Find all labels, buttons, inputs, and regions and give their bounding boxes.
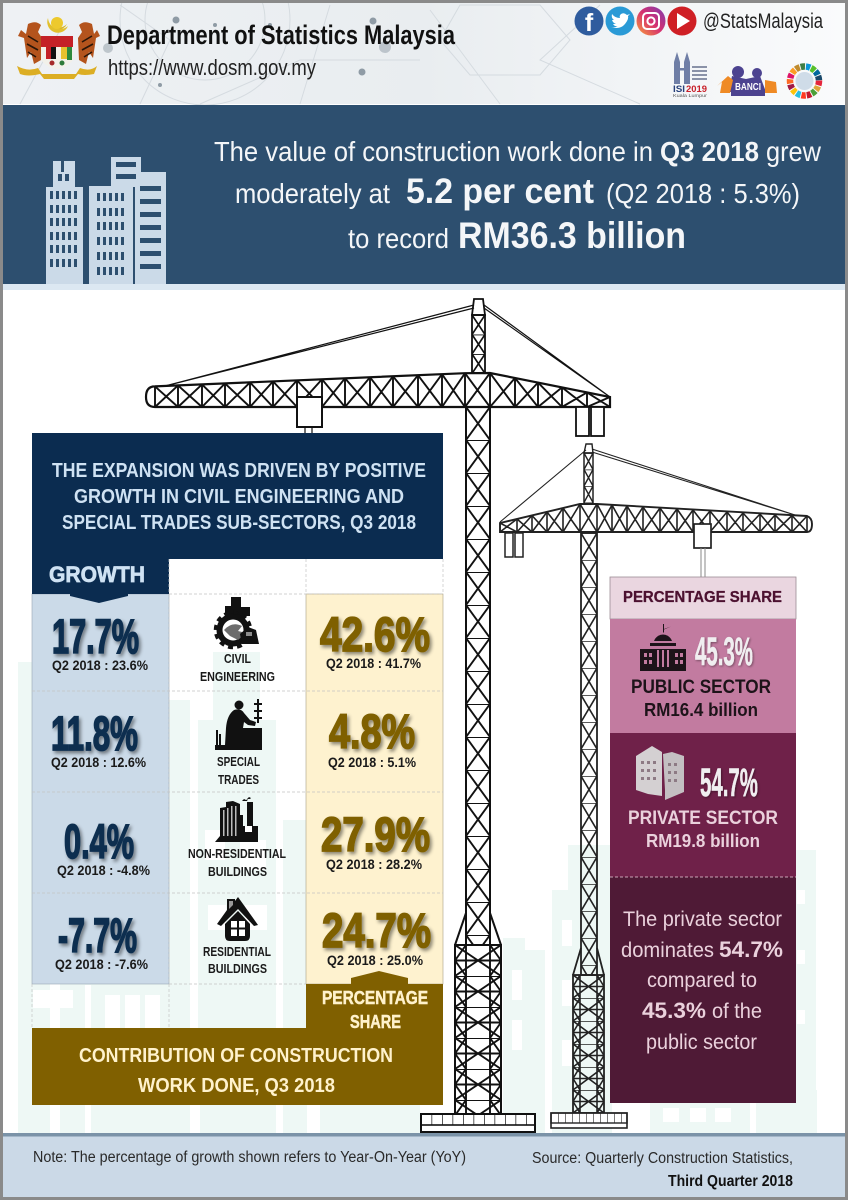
comparison callout: dominates [621, 939, 714, 962]
small tower crane [500, 444, 812, 1128]
small crane counterweights [505, 533, 523, 557]
headline text [214, 136, 821, 256]
logo: SDG wheel [790, 66, 819, 96]
row: civil engineering: Q2 2018 : 23.6% [52, 658, 148, 673]
comparison callout: 54.7% [719, 937, 783, 962]
row: residential buildings: -7.7% [58, 910, 137, 963]
panel footer: CONTRIBUTION OF CONSTRUCTION [79, 1045, 393, 1067]
row: civil engineering: CIVIL [224, 651, 251, 666]
row: special trades: 11.8% [51, 708, 138, 761]
comparison callout: compared to [647, 969, 757, 992]
icon: factory and tower [215, 797, 258, 842]
column: percentage share: SHARE [350, 1012, 401, 1032]
public sector block [610, 619, 796, 733]
public sector block: PUBLIC SECTOR [631, 677, 771, 698]
row: residential buildings: BUILDINGS [208, 961, 267, 976]
row: civil engineering [52, 597, 430, 684]
row: non-residential buildings: 0.4% [64, 816, 134, 869]
public sector block: RM16.4 billion [644, 700, 758, 720]
row: residential buildings: RESIDENTIAL [203, 944, 271, 959]
column: growth: GROWTH [49, 562, 145, 587]
private sector block [610, 733, 796, 877]
headline text: (Q2 2018 : 5.3%) [606, 178, 800, 209]
tigers [18, 22, 42, 64]
row: non-residential buildings: Q2 2018 : -4.8% [57, 863, 150, 878]
panel footer: WORK DONE, Q3 2018 [138, 1075, 335, 1097]
icon: worker silhouette [215, 699, 262, 750]
row: civil engineering: 17.7% [52, 611, 139, 664]
share heading: PERCENTAGE SHARE [623, 589, 782, 606]
icon: house [217, 897, 258, 941]
row: residential buildings: Q2 2018 : -7.6% [55, 957, 148, 972]
small crane jib [500, 504, 812, 532]
logo: ISI 2019: Kuala Lumpur [673, 93, 708, 98]
logo: coat of arms [17, 17, 100, 79]
row: special trades [51, 699, 416, 787]
row: residential buildings: Q2 2018 : 25.0% [327, 953, 423, 968]
source credit: Third Quarter 2018 [668, 1173, 793, 1190]
logo: census: BANCI [735, 82, 761, 93]
footer band [3, 1133, 845, 1197]
small crane mast [573, 533, 604, 1113]
source credit: Source: Quarterly Construction Statistics, [532, 1150, 793, 1167]
comparison callout: of the [712, 1000, 762, 1023]
row: special trades: TRADES [218, 772, 259, 787]
large tower crane [146, 299, 610, 1132]
shield [41, 36, 73, 47]
comparison callout: public sector [646, 1031, 757, 1054]
panel heading: GROWTH IN CIVIL ENGINEERING AND [74, 486, 404, 508]
headline text: The value of construction work done in [214, 136, 653, 167]
logo: ISI 2019: ISI [673, 84, 685, 94]
row: non-residential buildings: NON-RESIDENTIAL [188, 846, 286, 861]
row: civil engineering: Q2 2018 : 41.7% [326, 656, 421, 671]
small crane base [551, 1113, 627, 1128]
crane cab [297, 397, 322, 433]
logo: ISI 2019: 2019 [686, 84, 707, 94]
public sector block: 45.3% [695, 630, 753, 674]
panel: public vs private share [610, 577, 796, 1103]
column: percentage share: PERCENTAGE [322, 988, 428, 1008]
headline text: to record [348, 223, 449, 254]
crane head and cables [165, 299, 610, 397]
private sector block: RM19.8 billion [646, 831, 760, 851]
logo: census [717, 66, 777, 96]
row: non-residential buildings: Q2 2018 : 28.2% [326, 857, 422, 872]
icon: office block [636, 746, 684, 800]
panel heading: SPECIAL TRADES SUB-SECTORS, Q3 2018 [62, 512, 416, 534]
row: special trades: Q2 2018 : 12.6% [51, 755, 146, 770]
row: special trades: SPECIAL [217, 754, 260, 769]
panel footer [79, 1045, 393, 1097]
social media icons: f [585, 9, 594, 37]
small crane cab and hanger [694, 524, 711, 577]
footnote: Note: The percentage of growth shown refers to Year-On-Year (YoY) [33, 1149, 466, 1166]
headline band [3, 105, 845, 290]
comparison callout: The private sector [623, 908, 782, 931]
headline text: Q3 2018 [660, 136, 759, 167]
row: civil engineering: 42.6% [320, 609, 430, 662]
ribbon [17, 66, 97, 79]
row: special trades: Q2 2018 : 5.1% [328, 755, 416, 770]
row: non-residential buildings: BUILDINGS [208, 864, 267, 879]
row: non-residential buildings: 27.9% [321, 809, 430, 862]
table grid lines [32, 559, 443, 1028]
headline text: 5.2 per cent [406, 172, 594, 211]
column: growth [32, 559, 169, 984]
organisation title: Department of Statistics Malaysia [107, 20, 456, 50]
website address: https://www.dosm.gov.my [108, 55, 316, 80]
share heading [610, 577, 796, 619]
column: percentage share [32, 594, 443, 1105]
headline text: moderately at [235, 178, 390, 209]
source credit [532, 1150, 793, 1190]
icon: office buildings [46, 157, 166, 284]
row: civil engineering: ENGINEERING [200, 669, 275, 684]
small crane head and cables [500, 444, 795, 522]
row: residential buildings: 24.7% [322, 905, 431, 958]
headline text: RM36.3 billion [458, 215, 686, 256]
icon: civil engineering gear and skyline [216, 597, 259, 648]
private sector block: PRIVATE SECTOR [628, 808, 778, 829]
row: special trades: 4.8% [329, 706, 415, 759]
crane mast [455, 407, 501, 1114]
comparison callout [610, 877, 796, 1103]
private sector block: 54.7% [700, 761, 758, 805]
background: pale building silhouettes [18, 652, 817, 1135]
panel heading: THE EXPANSION WAS DRIVEN BY POSITIVE [52, 460, 426, 482]
crane base [421, 1114, 535, 1132]
row: non-residential buildings [57, 797, 430, 879]
comparison callout: 45.3% [642, 998, 706, 1023]
headline text: grew [766, 136, 821, 167]
crane jib [146, 373, 610, 407]
logo: ISI 2019 [673, 52, 708, 98]
row: residential buildings [55, 897, 431, 976]
social media icons [574, 6, 696, 37]
icon: government building [640, 624, 686, 671]
crane counterweights [576, 407, 604, 436]
panel heading [32, 433, 443, 559]
crescent and star [48, 24, 67, 30]
panel: sub-sector growth and contribution [32, 433, 443, 1105]
header band [3, 0, 845, 105]
